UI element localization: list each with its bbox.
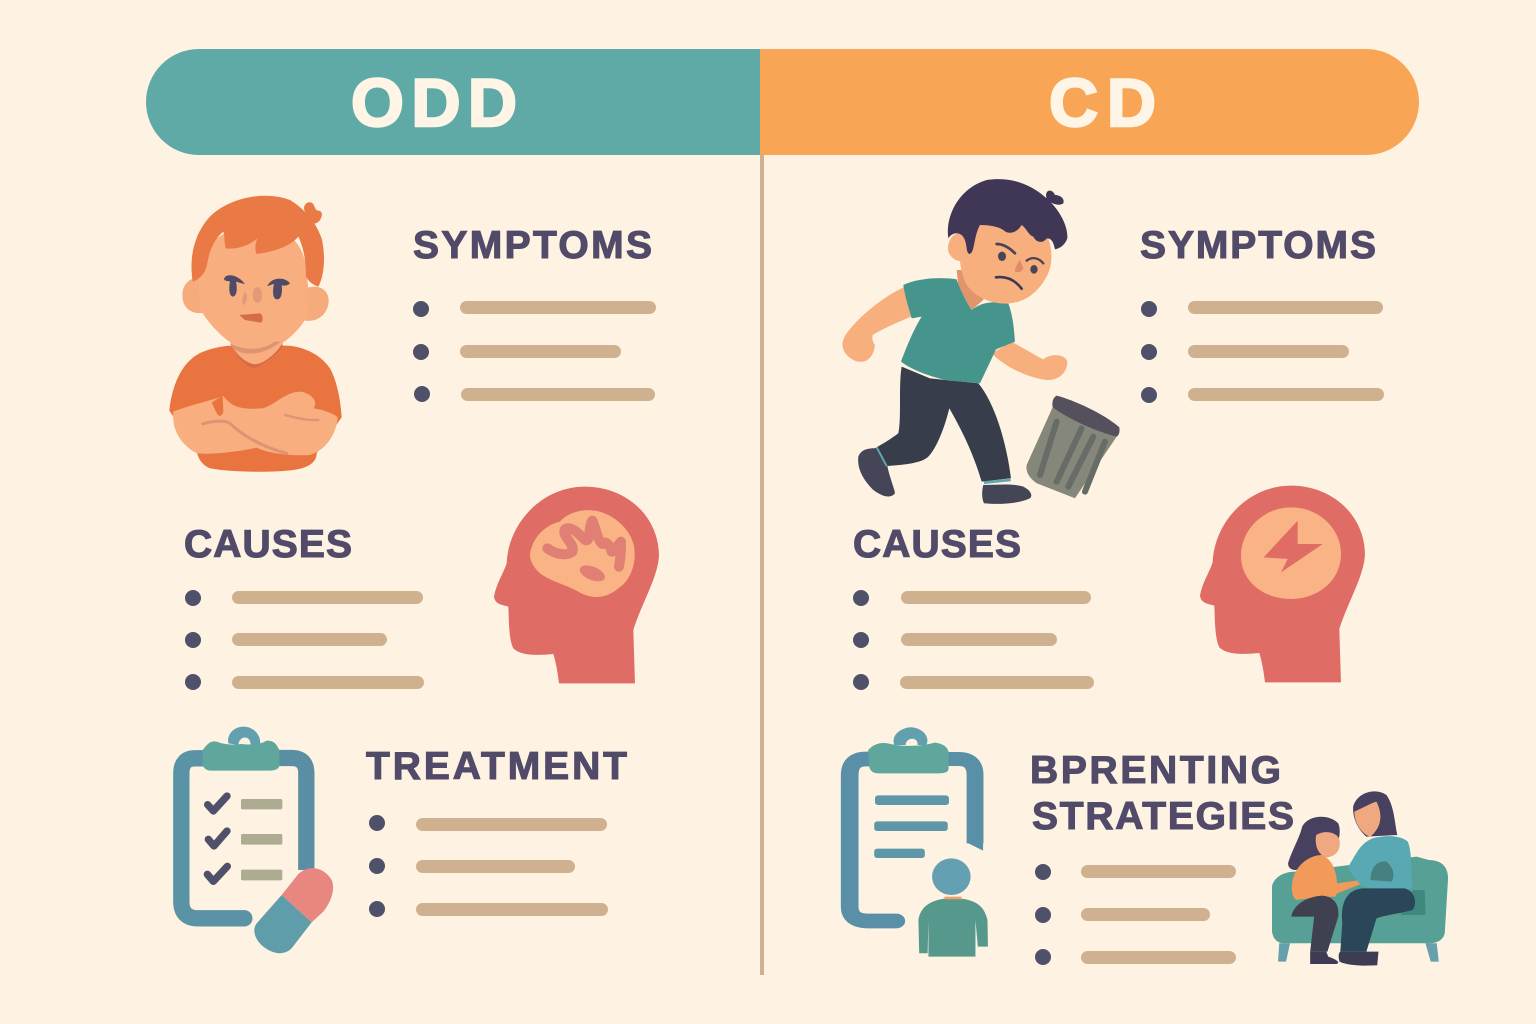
board xyxy=(850,759,896,921)
brows and eyes xyxy=(224,275,245,297)
bullet list xyxy=(369,815,608,917)
clip ring xyxy=(228,727,260,745)
mouth xyxy=(239,313,263,323)
trash can xyxy=(1026,396,1120,498)
hair xyxy=(948,179,1067,254)
crossed arms xyxy=(173,392,338,455)
checks and lines xyxy=(207,796,227,881)
icon: head with lightning bolt xyxy=(1200,486,1365,682)
illustration: ODD boy with crossed arms xyxy=(169,196,342,472)
document lines xyxy=(875,795,949,805)
parent xyxy=(1353,791,1397,837)
illustration: CD boy with trash can xyxy=(842,179,1120,504)
heading: STRATEGIES xyxy=(1032,795,1294,838)
section: ODD treatment xyxy=(366,745,627,917)
clip xyxy=(202,741,279,771)
face xyxy=(199,225,309,350)
heading: ODD: ODD xyxy=(351,65,517,141)
header band: CD xyxy=(760,49,1419,155)
heading: SYMPTOMS xyxy=(1140,224,1376,267)
nose xyxy=(253,287,262,303)
clip ring xyxy=(894,727,927,745)
bullet list xyxy=(1035,864,1236,965)
face features xyxy=(997,244,1015,253)
back arm xyxy=(842,287,915,362)
icon: head with brain xyxy=(494,487,659,683)
bullet list xyxy=(413,301,656,402)
heading: CD: CD xyxy=(1049,65,1156,141)
pill xyxy=(282,868,333,922)
illustration: parent and child on sofa xyxy=(1272,791,1448,966)
shirt xyxy=(901,278,1015,383)
header band: ODD xyxy=(146,49,760,155)
neck xyxy=(957,270,987,310)
neck xyxy=(228,337,283,367)
ear xyxy=(948,233,967,261)
section: ODD causes xyxy=(184,523,424,690)
bullet list xyxy=(185,590,424,690)
section: CD parenting strategies xyxy=(1030,749,1294,965)
section: CD symptoms xyxy=(1140,224,1384,403)
shirt xyxy=(169,346,342,472)
hair tuft xyxy=(1046,191,1064,205)
child xyxy=(1288,817,1340,870)
section: CD causes xyxy=(853,523,1094,690)
heading: CAUSES xyxy=(853,523,1021,566)
heading: BPRENTING xyxy=(1030,749,1281,792)
neck shadow xyxy=(230,342,281,354)
bullet list xyxy=(853,590,1094,690)
heading: SYMPTOMS xyxy=(413,224,652,267)
sofa xyxy=(1278,943,1439,962)
pants xyxy=(875,367,1011,482)
cuffs xyxy=(877,447,887,466)
center divider xyxy=(760,155,764,975)
front arm xyxy=(992,342,1067,380)
clip xyxy=(868,743,949,773)
hair tuft xyxy=(304,202,322,224)
shirt sleeve tip xyxy=(212,395,223,416)
icon: clipboard and pill xyxy=(181,727,333,953)
heading xyxy=(1030,749,1294,838)
board xyxy=(181,758,244,918)
bullet list xyxy=(1141,301,1384,403)
heading: TREATMENT xyxy=(366,745,627,788)
icon: clipboard with person xyxy=(850,727,988,957)
heading: CAUSES xyxy=(184,523,352,566)
arm folds xyxy=(203,421,287,453)
hair xyxy=(191,196,324,287)
section: ODD symptoms xyxy=(413,224,656,402)
person xyxy=(932,858,971,895)
ears xyxy=(182,278,205,313)
face xyxy=(960,218,1051,304)
shoes xyxy=(858,448,895,497)
